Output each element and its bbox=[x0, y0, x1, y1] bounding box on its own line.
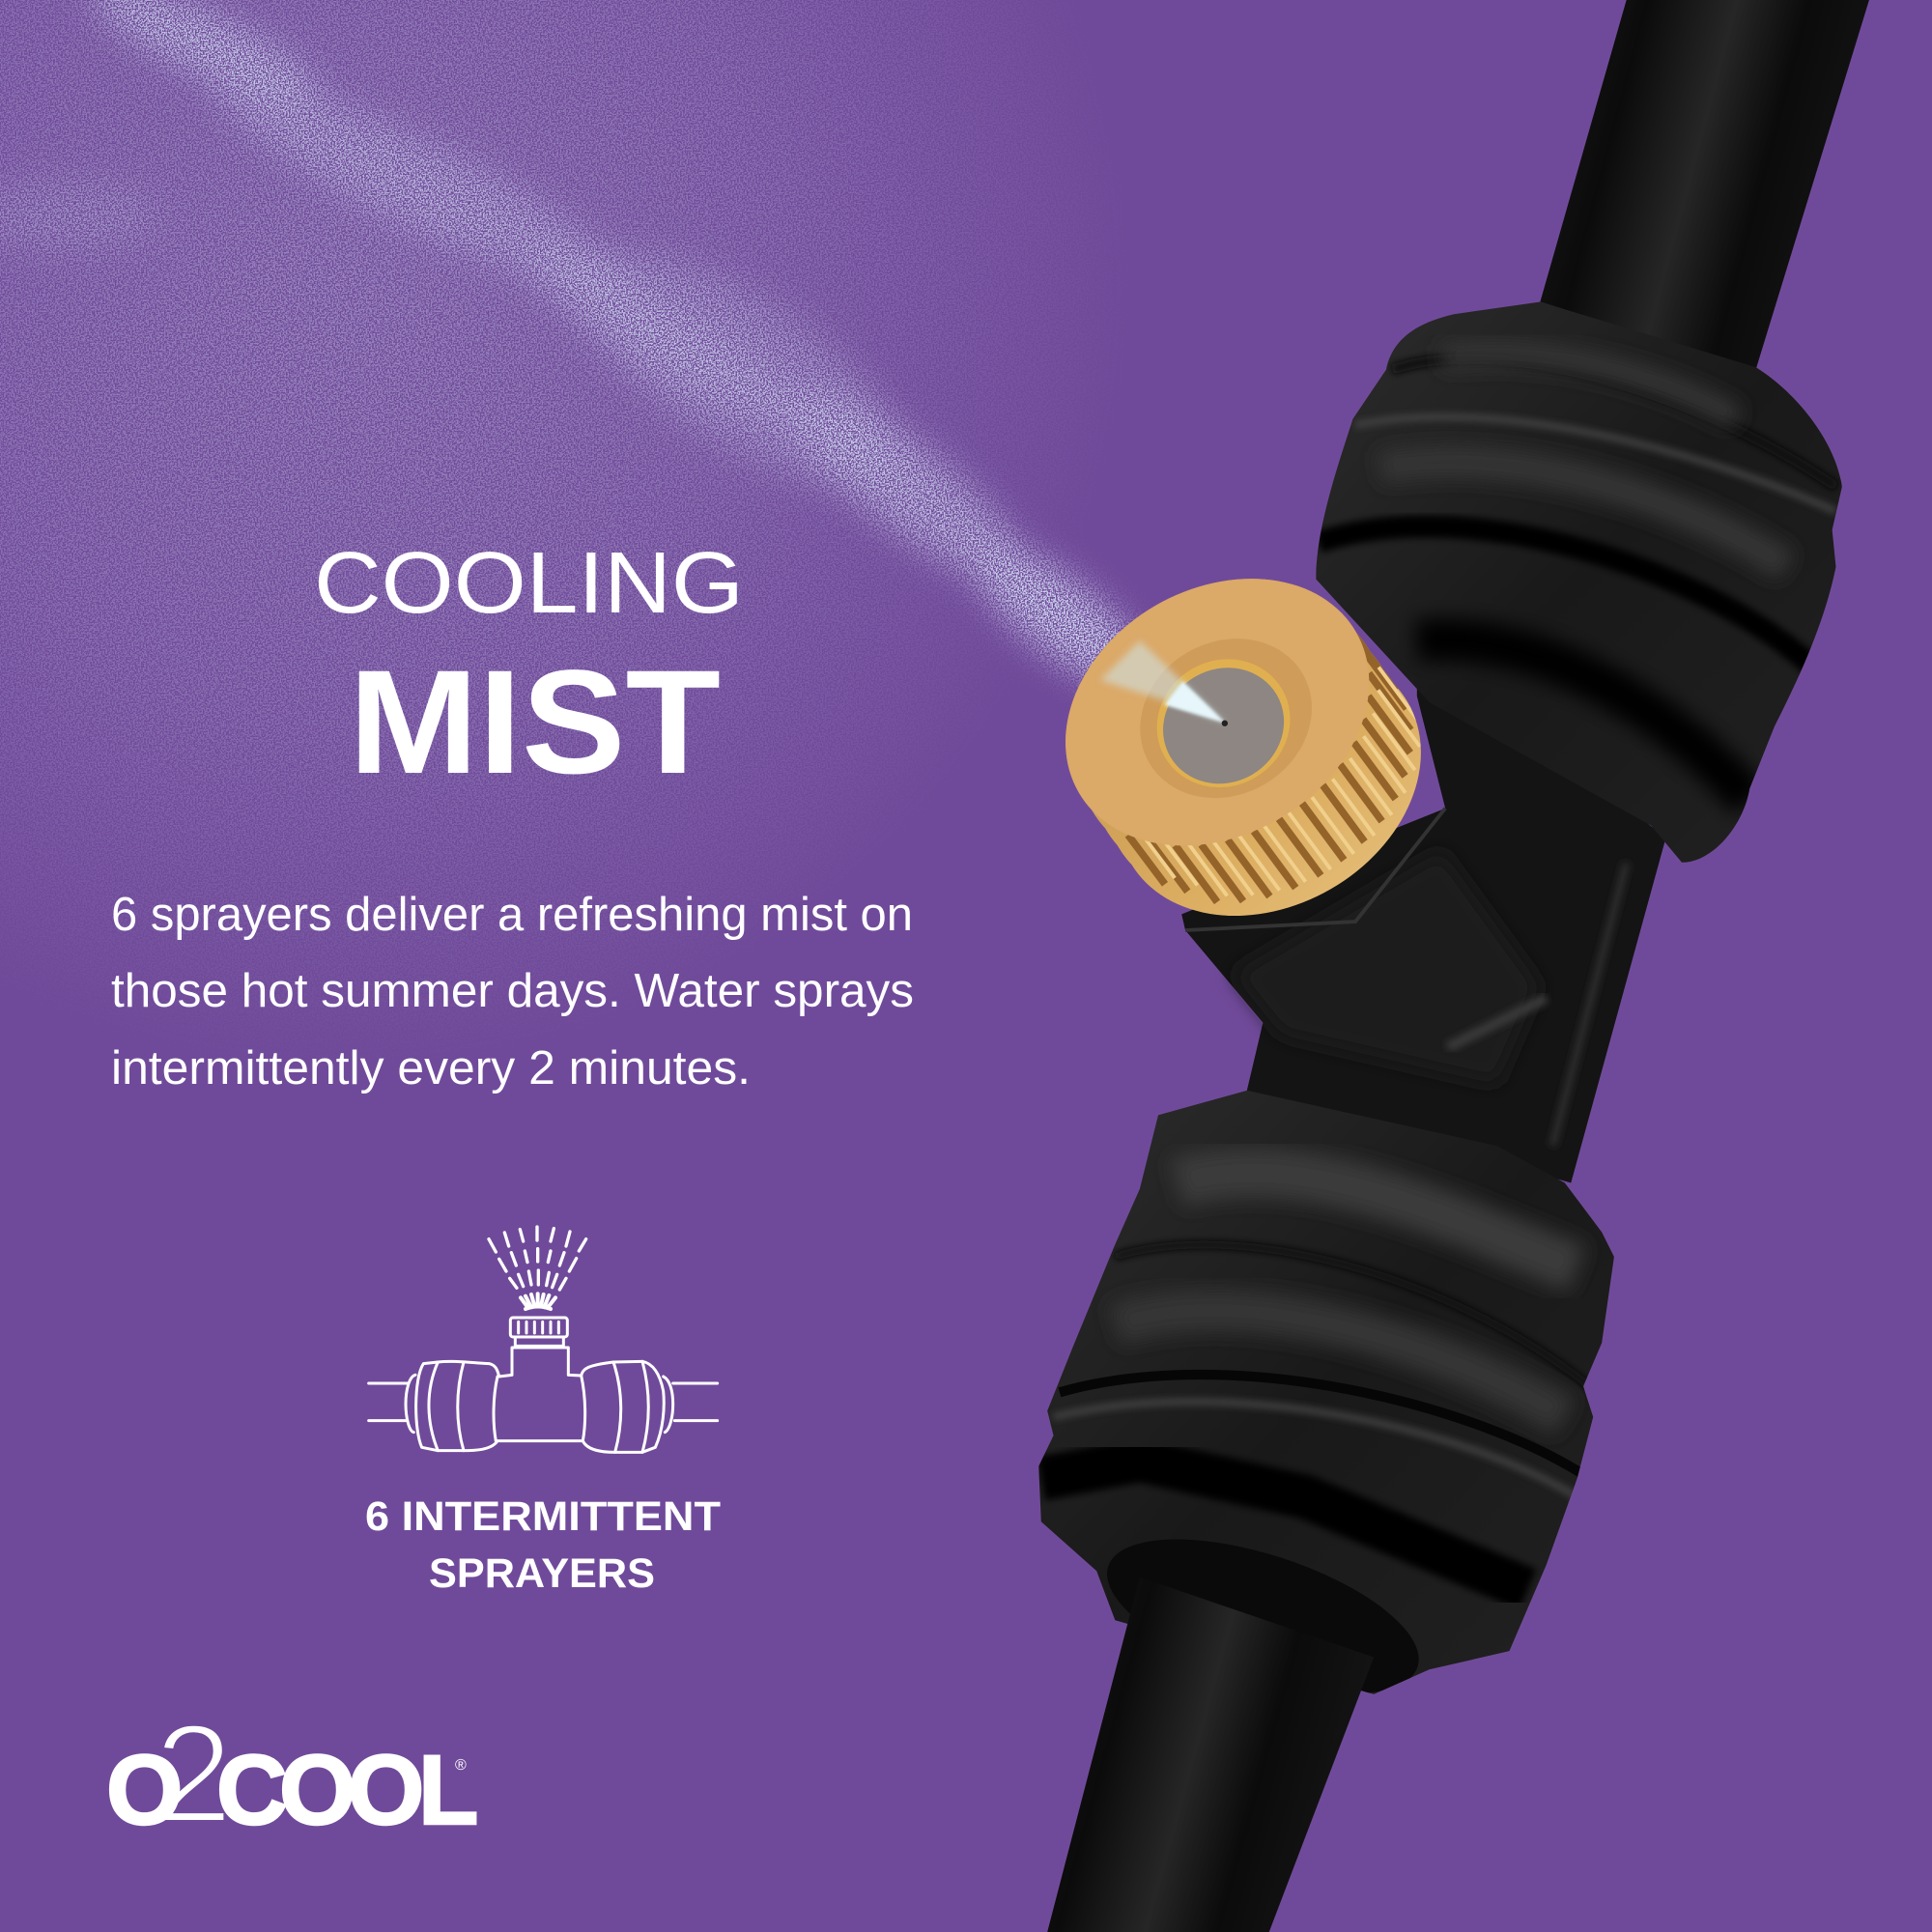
title bbox=[314, 535, 744, 805]
upper pipe bbox=[1540, 0, 1869, 370]
title: MIST bbox=[349, 639, 721, 805]
icon: sprayer fitting bbox=[369, 1227, 718, 1452]
logo: ® bbox=[455, 1757, 467, 1774]
knurled side bbox=[1065, 579, 1421, 916]
photo: mist sprayer fitting bbox=[1017, 0, 1869, 1932]
body text: those hot summer days. Water sprays bbox=[111, 965, 914, 1017]
logo: C bbox=[216, 1735, 288, 1845]
logo: O bbox=[279, 1735, 355, 1845]
body text bbox=[111, 889, 914, 1094]
lower collar bbox=[1038, 1091, 1614, 1694]
upper collar bbox=[1316, 301, 1842, 863]
lower pipe bbox=[1047, 1577, 1374, 1932]
spray on nozzle bbox=[1100, 640, 1226, 724]
brass face bbox=[1017, 526, 1418, 899]
icon label: SPRAYERS bbox=[429, 1550, 655, 1597]
logo: O bbox=[106, 1735, 183, 1845]
body text: intermittently every 2 minutes. bbox=[111, 1042, 751, 1094]
mist spray bbox=[0, 0, 1165, 1096]
body text: 6 sprayers deliver a refreshing mist on bbox=[111, 889, 913, 941]
T body bbox=[1181, 640, 1665, 1182]
logo: O bbox=[348, 1735, 424, 1845]
logo: 2 bbox=[155, 1695, 233, 1852]
grey disc bbox=[1142, 646, 1305, 806]
logo: L bbox=[418, 1735, 478, 1845]
icon label: 6 INTERMITTENT bbox=[365, 1493, 721, 1540]
title: COOLING bbox=[314, 535, 744, 632]
logo bbox=[106, 1695, 478, 1852]
icon: brass nozzle bbox=[1065, 579, 1421, 916]
icon label bbox=[365, 1493, 721, 1597]
